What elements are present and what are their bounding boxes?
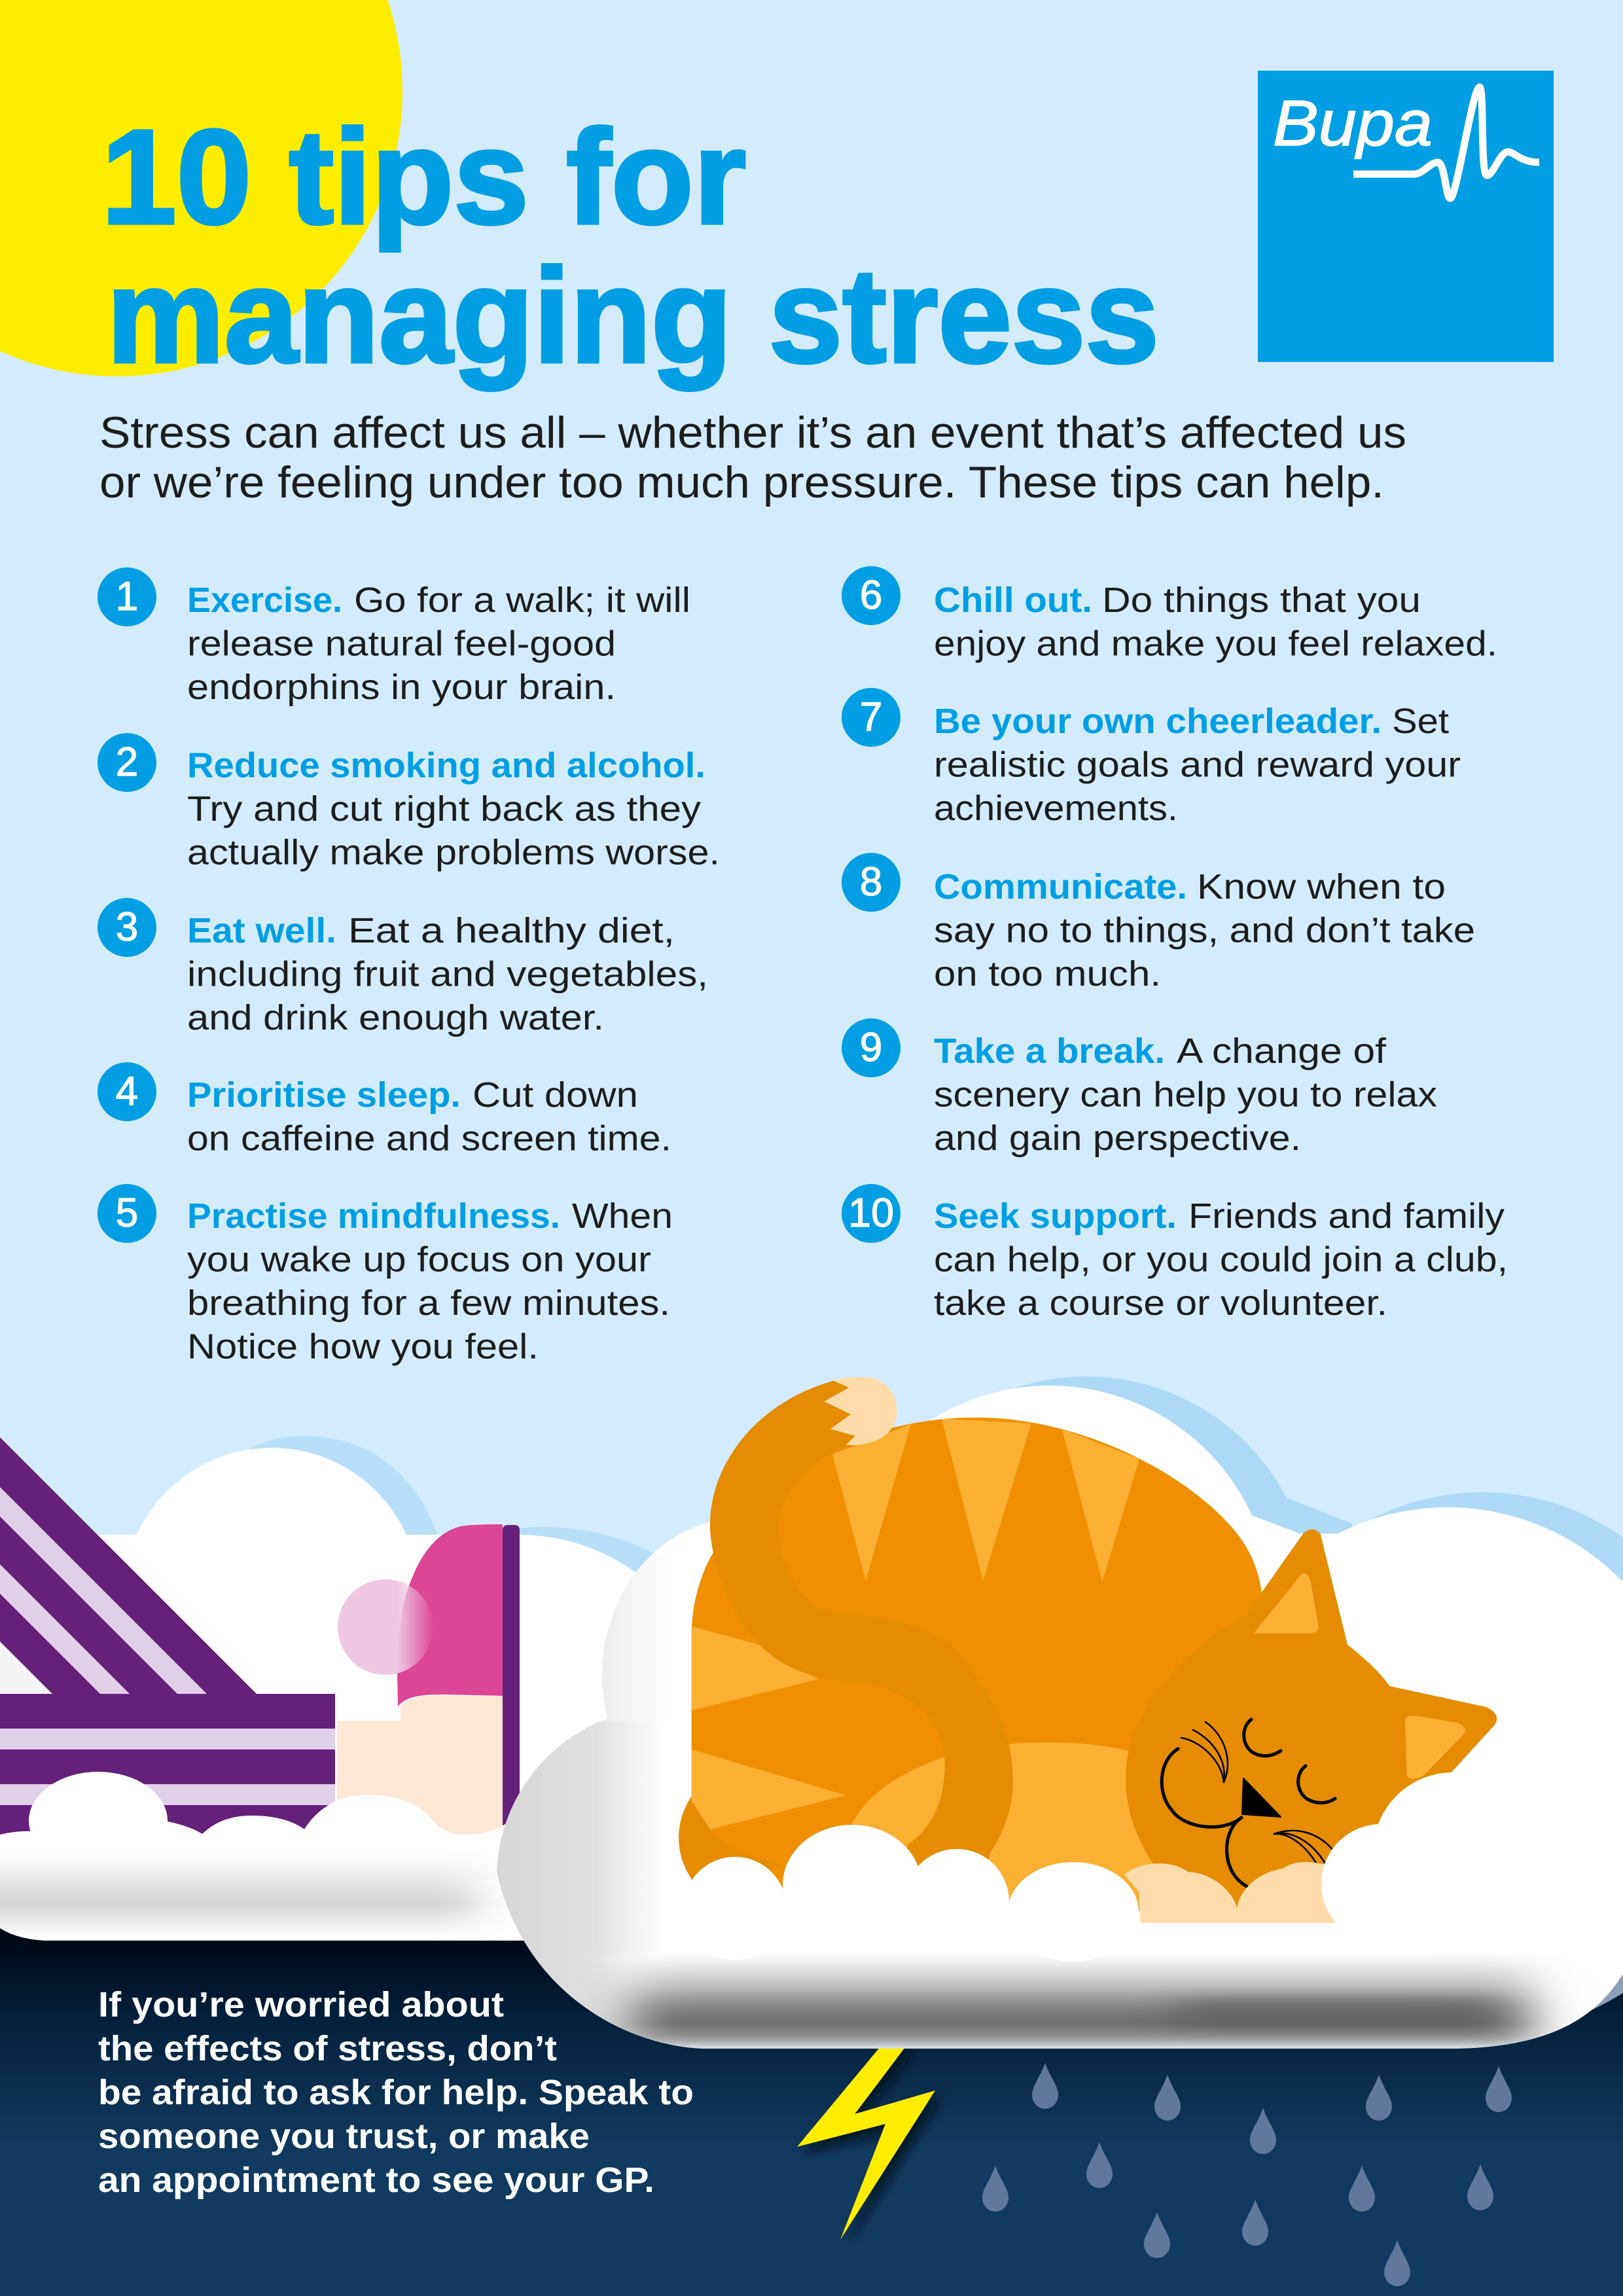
yellow sun — [0, 0, 402, 376]
tip 3: including fruit and vegetables, — [187, 954, 708, 994]
title: managing stress — [107, 241, 1159, 391]
night sky band — [0, 1924, 1623, 2296]
cat head — [1126, 1530, 1497, 1911]
tip 5 — [98, 1184, 673, 1367]
tip 7: realistic goals and reward your — [934, 745, 1461, 784]
cat ears inner — [1254, 1573, 1465, 1778]
left cloud front bumps — [0, 1772, 524, 1941]
tip 7 — [842, 688, 1461, 828]
tip 2: Try and cut right back as they — [187, 789, 701, 829]
tip 3: Eat a healthy diet, — [348, 911, 675, 950]
cat tail — [710, 1381, 1013, 1902]
tip 1: Exercise. — [187, 581, 342, 620]
tip 6: Chill out. — [934, 581, 1092, 620]
tip 9: A change of — [1177, 1031, 1387, 1071]
callout: ask for help: If you’re worried about — [98, 1985, 504, 2024]
tip 5: 5 — [116, 1191, 138, 1236]
cat haunch — [679, 1796, 784, 1879]
tip 4: Prioritise sleep. — [187, 1075, 461, 1115]
right cloud — [491, 1374, 1623, 2055]
tip 2: 2 — [116, 740, 138, 785]
title — [101, 102, 1159, 391]
tip 7: 7 — [860, 694, 882, 740]
tip 10: Seek support. — [934, 1196, 1177, 1236]
tip 6: Do things that you — [1102, 581, 1421, 620]
tip 8: Communicate. — [934, 867, 1187, 906]
callout: ask for help — [98, 1985, 694, 2200]
tip 6: enjoy and make you feel relaxed. — [934, 624, 1497, 664]
sleeping person: pink hat — [397, 1524, 503, 1706]
left cloud — [0, 1535, 524, 1941]
cat stripes — [692, 1419, 1167, 1911]
callout: ask for help: someone you trust, or make — [98, 2117, 590, 2156]
left cloud underside shading — [0, 1863, 496, 1931]
intro text: Stress can affect us all – whether it’s an event that’s affected us — [99, 408, 1406, 457]
tip 2 — [98, 733, 720, 872]
left cloud back shadow — [251, 1436, 653, 1572]
bed: purple striped duvet — [0, 1437, 335, 1838]
right cloud back shadow — [861, 1376, 1623, 2024]
tip 3: 3 — [116, 905, 138, 950]
tip 8: on too much. — [934, 954, 1161, 994]
callout: ask for help: the effects of stress, don’t — [98, 2029, 557, 2068]
tip 10: can help, or you could join a club, — [934, 1240, 1508, 1279]
rain drops — [982, 2063, 1512, 2286]
tip 7: Be your own cheerleader. — [934, 702, 1382, 741]
tip 1: Go for a walk; it will — [354, 581, 690, 620]
tip 3: and drink enough water. — [187, 998, 604, 1037]
lightning bolt — [797, 2042, 935, 2240]
tip 1: release natural feel-good — [187, 624, 616, 664]
left cloud top bumps — [124, 1448, 717, 1930]
tip 9: 9 — [860, 1025, 882, 1070]
tip 2: actually make problems worse. — [187, 833, 720, 872]
tip 8 — [842, 853, 1475, 994]
tip 5: Notice how you feel. — [187, 1327, 539, 1367]
cat paws — [1124, 1862, 1335, 1923]
intro text: or we’re feeling under too much pressure. These tips can help. — [99, 457, 1384, 507]
bed post — [503, 1525, 520, 1833]
tip 5: Practise mindfulness. — [187, 1196, 560, 1236]
cat face — [1162, 1719, 1335, 1886]
tip 5: you wake up focus on your — [187, 1240, 651, 1279]
tip 5: breathing for a few minutes. — [187, 1283, 670, 1323]
tip 4: 4 — [116, 1069, 138, 1114]
right cloud front bumps — [683, 1772, 1571, 1962]
callout: ask for help: be afraid to ask for help. Speak to — [98, 2073, 694, 2112]
tip 9: scenery can help you to relax — [934, 1075, 1437, 1114]
tip 5: When — [572, 1196, 673, 1236]
tip 10 — [842, 1184, 1508, 1323]
sleeping person: face — [337, 1695, 503, 1839]
tip 10: Friends and family — [1188, 1196, 1505, 1236]
tip 8: Know when to — [1197, 867, 1446, 906]
tip 6: 6 — [860, 573, 882, 618]
callout: ask for help: an appointment to see your GP. — [98, 2161, 654, 2200]
tip 9: Take a break. — [934, 1031, 1165, 1071]
tip 1: endorphins in your brain. — [187, 668, 616, 707]
logo: Bupa: Bupa — [1273, 87, 1433, 159]
tip 9: and gain perspective. — [934, 1119, 1301, 1158]
tip 1 — [98, 567, 690, 707]
tip 10: 10 — [848, 1191, 894, 1236]
cat tail tip — [825, 1377, 897, 1445]
tip 9 — [842, 1018, 1437, 1158]
tip 4: Cut down — [473, 1075, 638, 1115]
tip 3: Eat well. — [187, 911, 336, 950]
tip 6 — [842, 566, 1497, 664]
cat — [679, 1377, 1497, 1911]
hat pompom — [338, 1579, 433, 1675]
tip 7: Set — [1392, 702, 1449, 741]
title: 10 tips for — [101, 102, 746, 252]
intro text — [99, 408, 1406, 507]
tip 4: on caffeine and screen time. — [187, 1119, 671, 1158]
tip 10: take a course or volunteer. — [934, 1283, 1387, 1323]
tip 2: Reduce smoking and alcohol. — [187, 746, 705, 785]
tip 1: 1 — [116, 574, 138, 619]
tip 8: say no to things, and don’t take — [934, 911, 1475, 950]
tip 7: achievements. — [934, 789, 1178, 828]
tip 3 — [98, 898, 708, 1037]
cat body — [692, 1418, 1263, 1911]
logo: Bupa — [1258, 71, 1554, 362]
tip 4 — [98, 1062, 671, 1158]
tip 8: 8 — [860, 859, 882, 905]
